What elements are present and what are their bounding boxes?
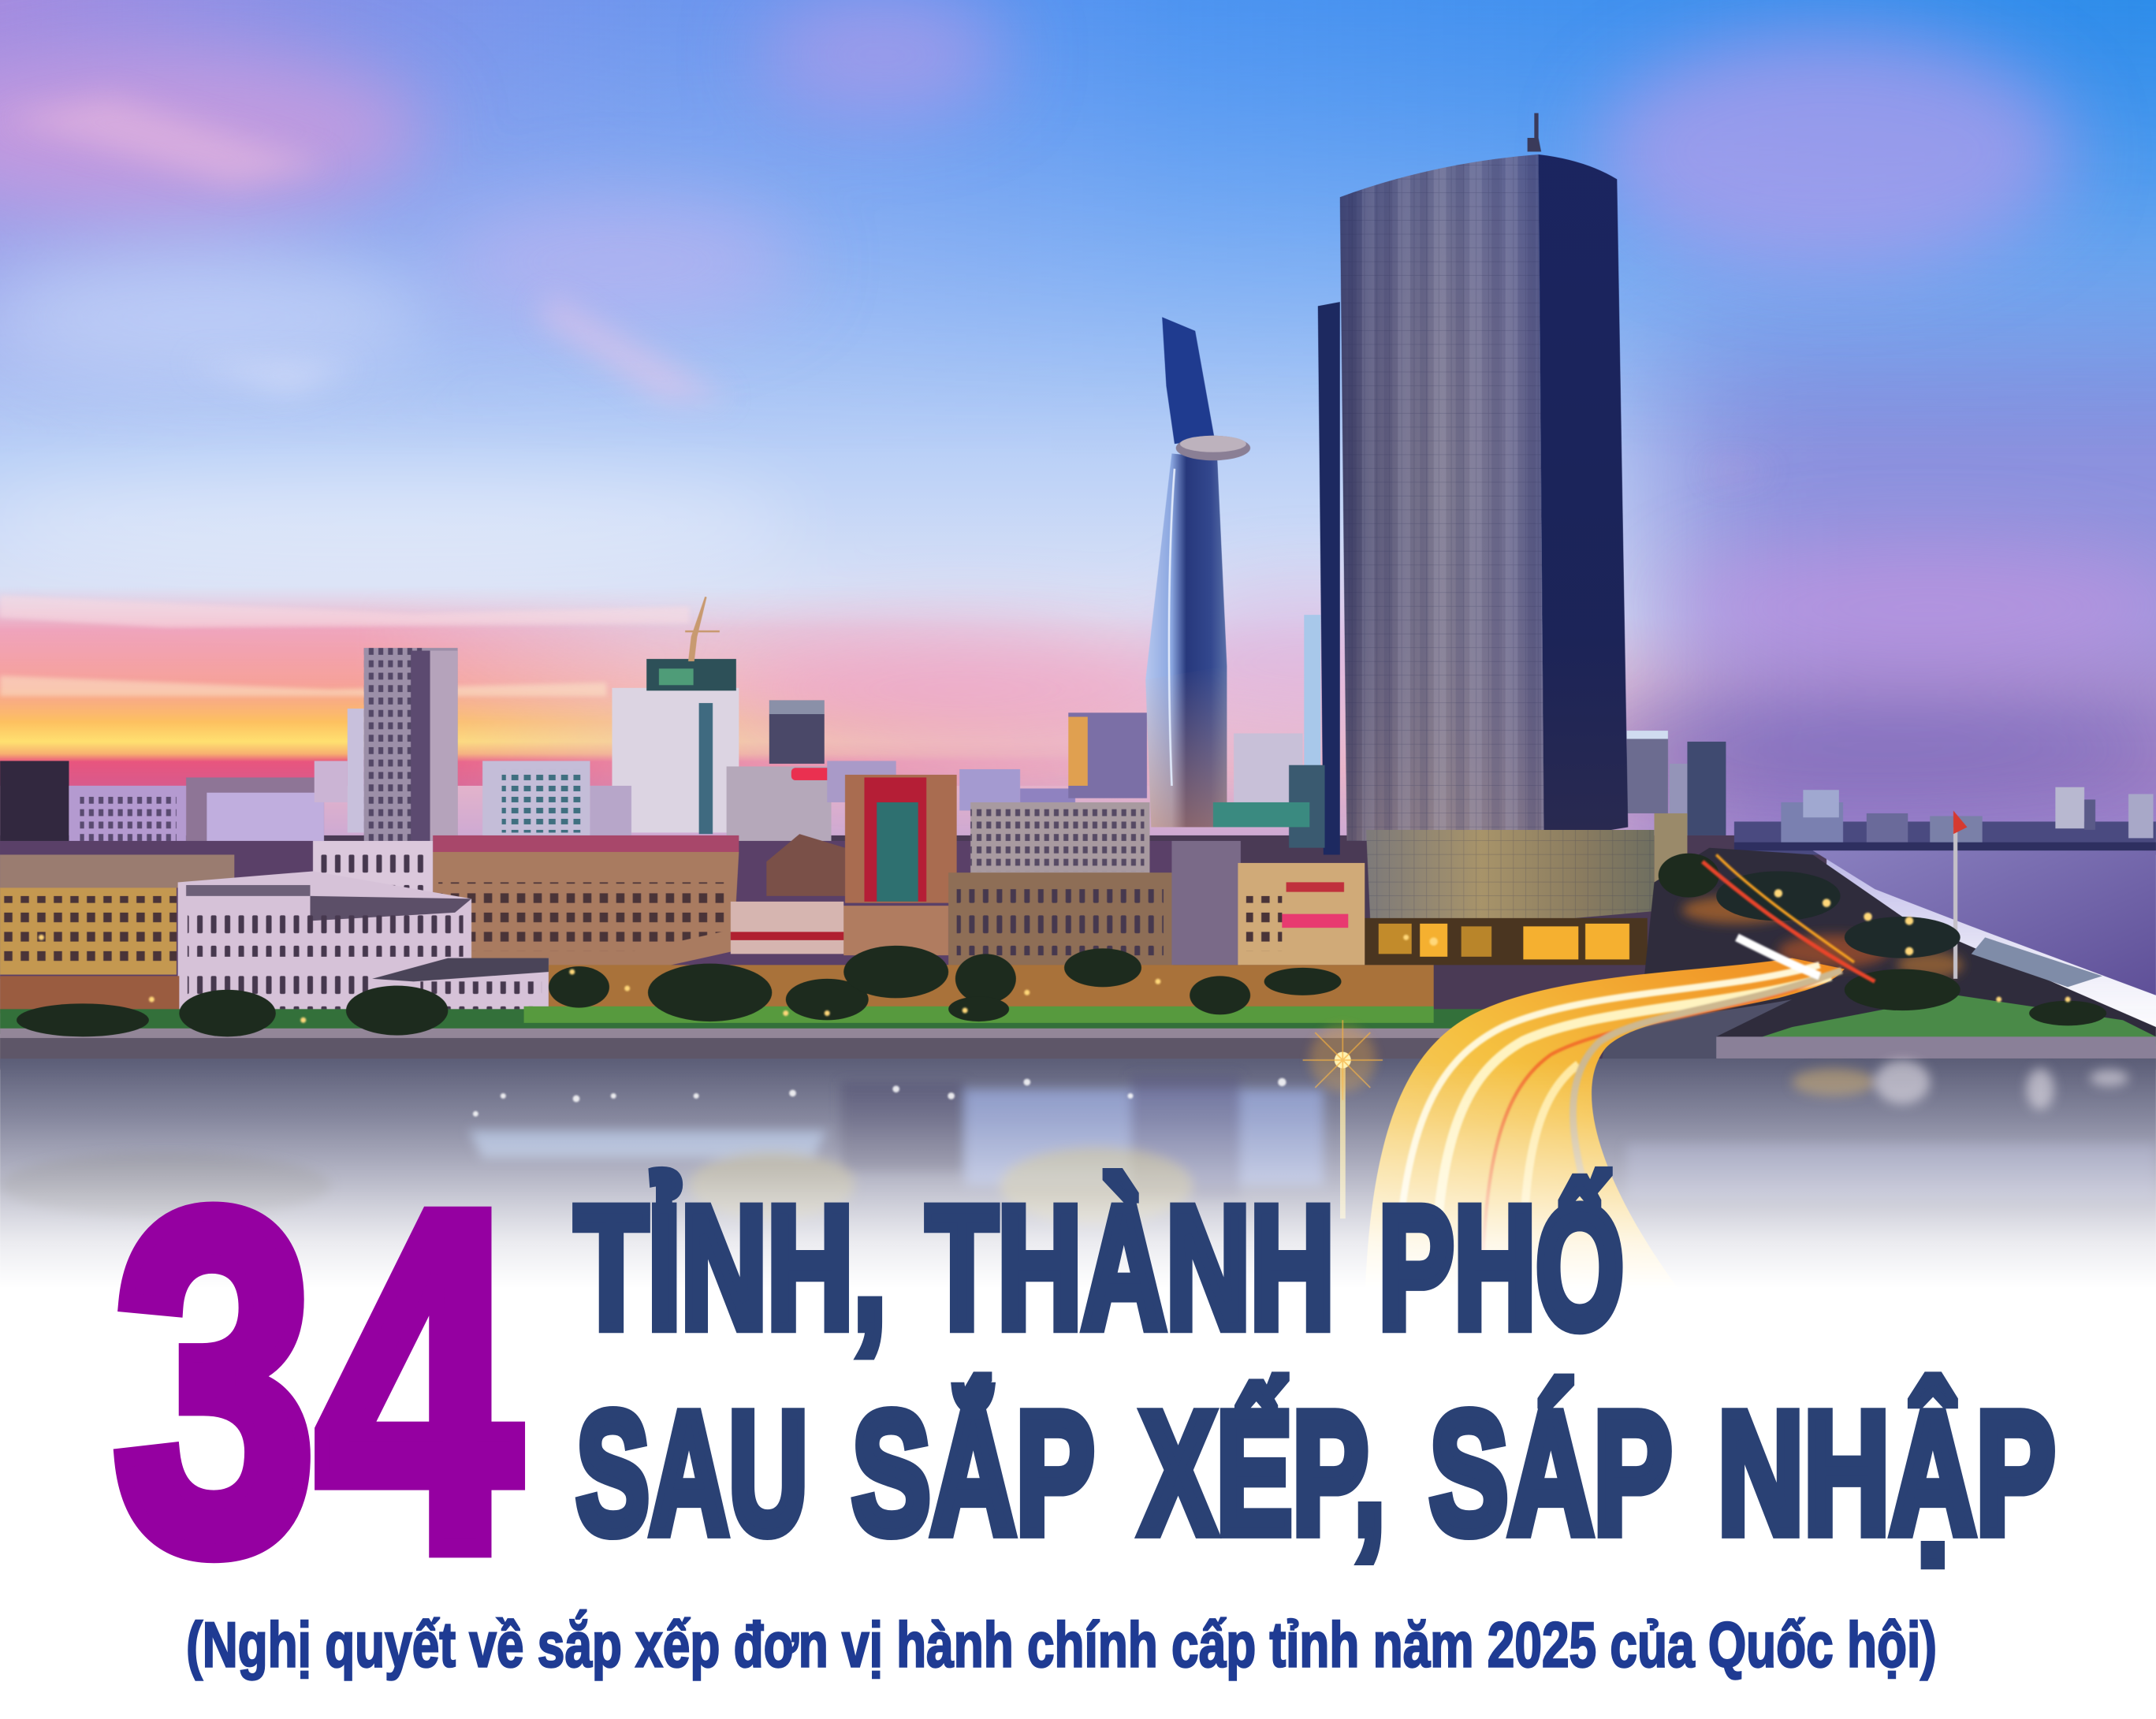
right bank peninsula <box>1599 810 2156 1073</box>
illuminated bridge with light trails <box>1365 854 1875 1303</box>
mid-ground tall buildings <box>0 597 1726 861</box>
Bitexco Financial Tower <box>1145 317 1250 827</box>
river on the right <box>1813 850 2156 995</box>
title line 2: SÁP <box>1429 1376 1672 1570</box>
distant skyline on the right bank <box>1734 787 2156 854</box>
title line 1: TỈNH, <box>575 1170 886 1364</box>
white colonial building <box>178 841 549 1036</box>
title line 1: PHỐ <box>1379 1170 1624 1364</box>
trees <box>17 854 2106 1036</box>
sky <box>0 0 2156 910</box>
title line 2: SẮP <box>852 1376 1094 1570</box>
photo: Ho Chi Minh City skyline at dusk <box>0 0 2156 1303</box>
white fade at the bottom of the photo <box>0 1062 2156 1289</box>
title line 1: THÀNH <box>926 1170 1335 1364</box>
street lamps and city lights <box>39 889 2071 1219</box>
heading: main title <box>575 1170 2055 1570</box>
title line 2: XẾP, <box>1140 1376 1385 1570</box>
water with reflections <box>0 1059 2156 1303</box>
title line 1 <box>575 1170 1624 1364</box>
street, lawn and embankment <box>0 965 1599 1068</box>
big number: 34: 34 <box>113 1111 522 1650</box>
downtown buildings around the waterfront <box>0 765 1365 979</box>
ground base behind the city <box>0 835 1826 1070</box>
Saigon One Tower <box>1318 113 1687 965</box>
title line 2: SAU <box>576 1376 808 1570</box>
title line 2 <box>576 1376 2055 1570</box>
